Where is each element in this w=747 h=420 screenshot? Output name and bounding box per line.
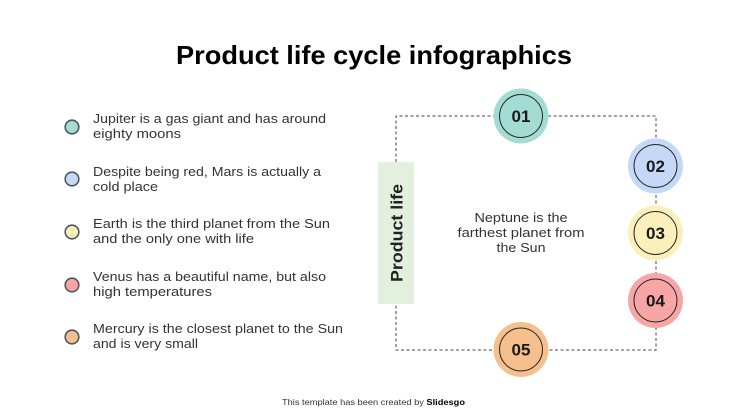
dashed cycle path bbox=[396, 116, 656, 350]
list item 2: Despite being red, Mars is actually a bbox=[93, 164, 322, 179]
list item 1: eighty moons bbox=[93, 126, 182, 141]
center text bbox=[458, 210, 584, 255]
center text: farthest planet from bbox=[458, 225, 584, 240]
title: Product life cycle infographics bbox=[176, 40, 572, 70]
node 04 bbox=[628, 273, 683, 328]
list item 4: high temperatures bbox=[93, 284, 213, 299]
list item 5 bbox=[65, 321, 343, 351]
side label: product life bbox=[378, 162, 414, 304]
node 05 bbox=[494, 322, 548, 377]
list item 5: and is very small bbox=[93, 336, 198, 351]
list item 3: Earth is the third planet from the Sun bbox=[93, 216, 330, 231]
list item 2 bbox=[65, 164, 322, 194]
node 02: 02 bbox=[646, 157, 665, 176]
node 01 bbox=[494, 88, 548, 144]
center text: Neptune is the bbox=[474, 210, 568, 225]
list item 2: cold place bbox=[93, 179, 158, 194]
node 03 bbox=[628, 206, 683, 260]
node 01: 01 bbox=[512, 107, 530, 126]
node 04: 04 bbox=[646, 292, 665, 310]
list item 4 bbox=[65, 269, 326, 299]
footer credit: This template has been created by Slidesgo bbox=[282, 397, 465, 407]
list item 4: Venus has a beautiful name, but also bbox=[93, 269, 326, 284]
cycle diagram bbox=[378, 88, 683, 377]
list item 1: Jupiter is a gas giant and has around bbox=[93, 111, 326, 126]
list item 3: and the only one with life bbox=[93, 231, 254, 246]
side label: product life: Product life bbox=[388, 184, 406, 282]
list item 3 bbox=[65, 216, 330, 246]
node 05: 05 bbox=[512, 340, 530, 360]
center text: the Sun bbox=[496, 240, 546, 255]
list item 5: Mercury is the closest planet to the Sun bbox=[93, 321, 343, 336]
node 02 bbox=[628, 138, 683, 194]
list: product life stages bbox=[65, 111, 343, 351]
list item 1 bbox=[65, 111, 326, 141]
node 03: 03 bbox=[646, 224, 665, 243]
